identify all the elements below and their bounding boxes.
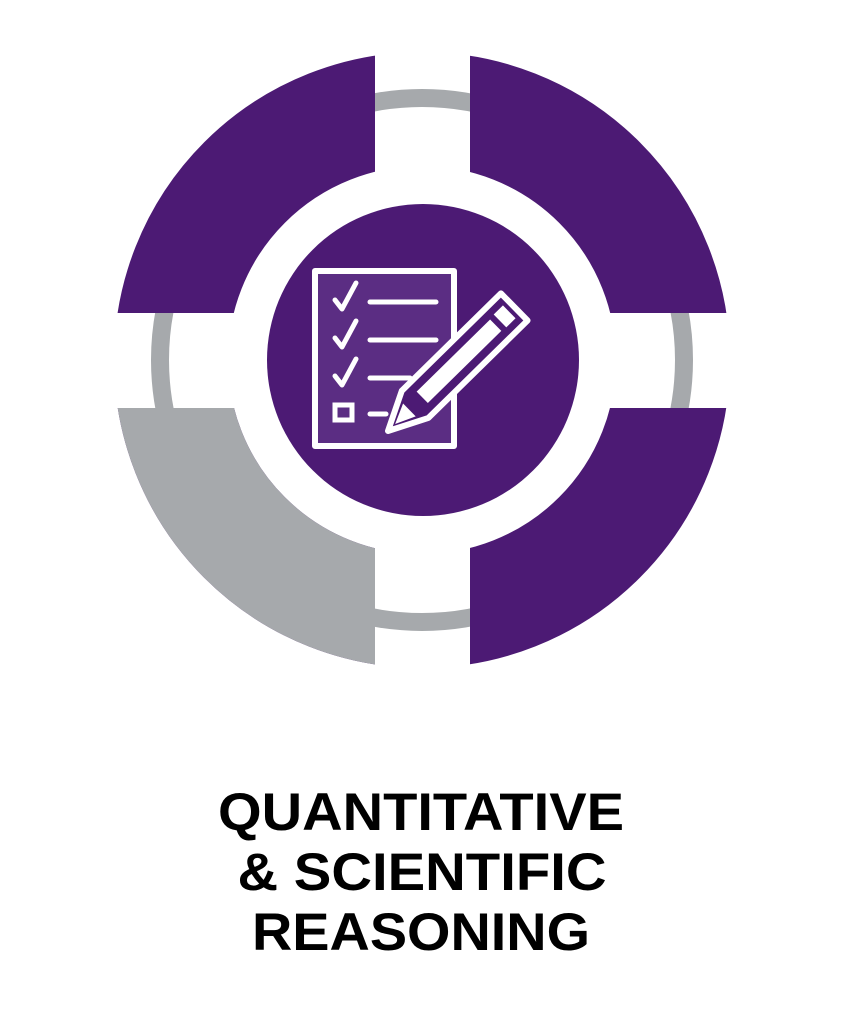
icon: checklist (315, 271, 454, 446)
title: & SCIENTIFIC (238, 843, 606, 902)
title (218, 783, 624, 962)
title: REASONING (252, 903, 590, 962)
title: QUANTITATIVE (218, 783, 624, 842)
ring segments (171, 109, 673, 611)
icon: pencil (375, 293, 528, 445)
center circle (267, 204, 579, 516)
gray ring (160, 98, 684, 622)
infographic (118, 56, 726, 950)
